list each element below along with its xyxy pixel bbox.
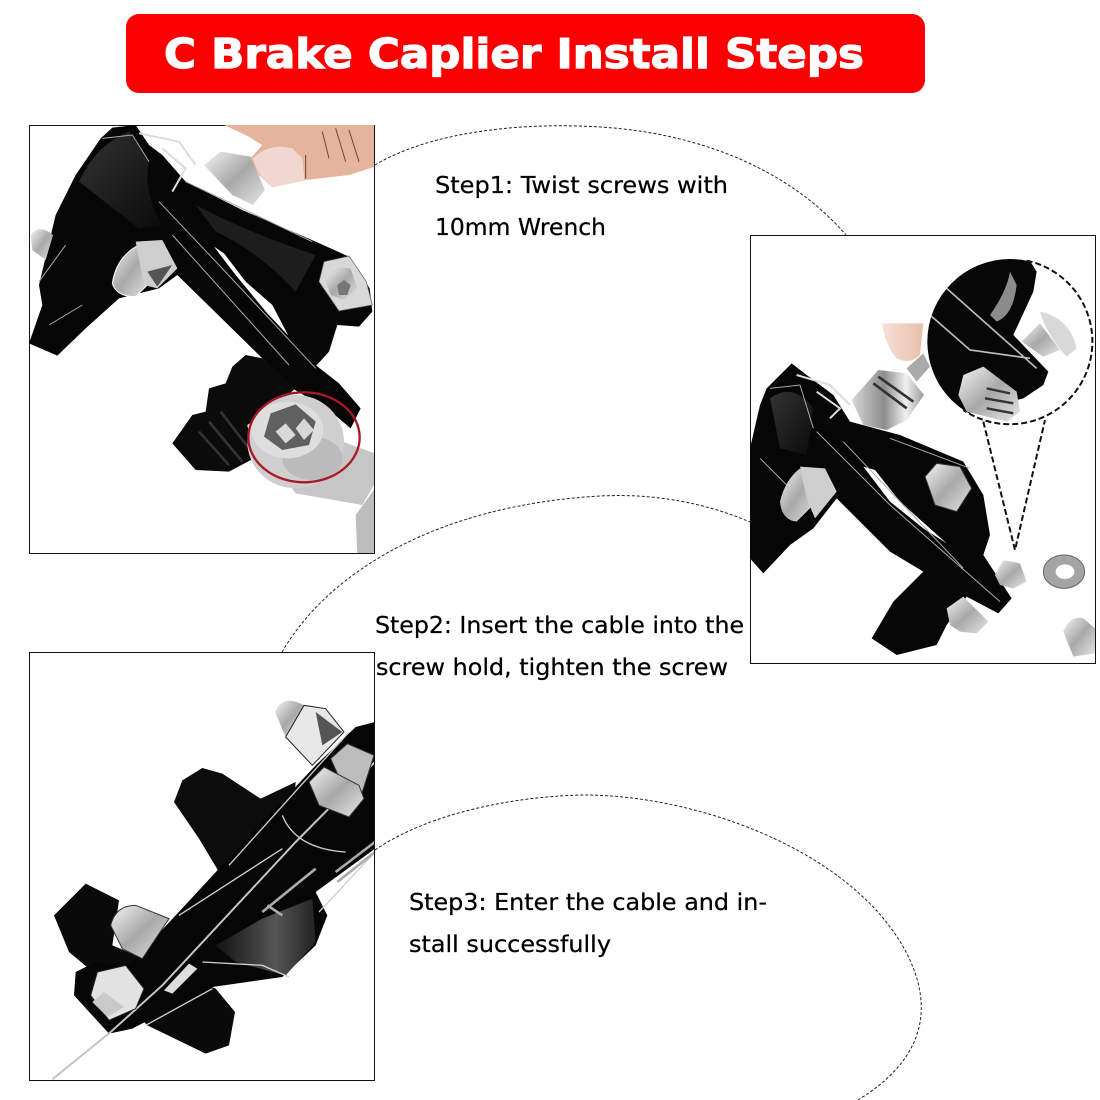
thin silver pin bbox=[907, 353, 930, 382]
hand blur at bottom right bbox=[356, 488, 375, 555]
step 3 text: Step3: Enter the cable and in- bbox=[409, 890, 767, 916]
lower nut and stud bbox=[947, 597, 988, 633]
panel: cable through caliper bbox=[30, 652, 375, 1080]
bolt head at arm tip bbox=[995, 560, 1027, 588]
step 3 text: stall successfully bbox=[409, 932, 611, 958]
lower brake pad bbox=[54, 884, 235, 1054]
inset magnified circle bbox=[917, 258, 1093, 424]
loose cap nut bbox=[1063, 618, 1095, 657]
arm sheen bbox=[770, 392, 813, 455]
barrel dark bands bbox=[873, 377, 913, 408]
dashed arc: step 3 bbox=[375, 795, 921, 1100]
highlight lines bbox=[760, 385, 1000, 602]
finger bbox=[224, 125, 375, 187]
brake shoe bbox=[172, 355, 296, 472]
caliper black body bbox=[29, 125, 372, 428]
step 3 text bbox=[409, 890, 767, 958]
dashed arc: step 1 bbox=[375, 126, 846, 235]
photo frame bbox=[750, 236, 1096, 664]
caliper black body bbox=[74, 722, 375, 1034]
hex bolt bbox=[309, 744, 374, 817]
cable hook bbox=[797, 375, 850, 418]
wrench head speckle bbox=[282, 437, 342, 480]
shoe ridges bbox=[199, 412, 249, 465]
silver barrel bbox=[204, 152, 265, 205]
step 2 text bbox=[375, 613, 744, 681]
slot in arm bbox=[863, 467, 947, 543]
inset dashed border bbox=[963, 261, 1092, 424]
end nut and stud bbox=[91, 965, 144, 1020]
banner background bbox=[126, 14, 925, 93]
caliper illustration bbox=[29, 125, 375, 555]
slot in arm bbox=[214, 247, 288, 336]
dashed arc: step 2 bbox=[282, 496, 750, 652]
inset contents bbox=[917, 258, 1077, 422]
caliper black body bbox=[750, 363, 1012, 655]
title banner bbox=[126, 14, 925, 93]
panel: exploded view of caliper with inset bbox=[750, 236, 1096, 664]
cable hook bbox=[139, 133, 196, 192]
washer highlight bbox=[164, 964, 197, 994]
highlight lines bbox=[146, 732, 375, 1025]
caliper illustration bbox=[52, 701, 375, 1079]
step 1 text: 10mm Wrench bbox=[435, 215, 606, 241]
arm highlight bbox=[79, 132, 162, 228]
bolt in socket bbox=[276, 418, 314, 443]
hex bolt on arm bbox=[925, 463, 972, 512]
inset white backing bbox=[927, 259, 1093, 424]
upper arm sheen bbox=[196, 205, 316, 292]
title text: C Brake Caplier Install Steps bbox=[164, 30, 864, 78]
red ellipse highlight bbox=[248, 392, 360, 482]
large cap nut bbox=[112, 240, 177, 297]
hex socket ring bbox=[251, 402, 323, 458]
step 1 text bbox=[435, 173, 728, 241]
small cap nut bbox=[31, 229, 53, 260]
step 1 text: Step1: Twist screws with bbox=[435, 173, 728, 199]
brake cable bbox=[52, 762, 375, 1079]
wrench head bbox=[247, 395, 344, 488]
highlight lines bbox=[39, 135, 316, 368]
lower cap nut bbox=[111, 905, 169, 959]
top cap nut bbox=[275, 701, 344, 765]
caliper illustration bbox=[750, 258, 1095, 657]
hex bolt on arm bbox=[319, 256, 372, 311]
silver barrel bbox=[852, 370, 924, 430]
photo frame bbox=[30, 126, 374, 554]
washer bbox=[1043, 555, 1085, 588]
upper brake pad bbox=[174, 768, 296, 872]
step 2 text: screw hold, tighten the screw bbox=[376, 655, 728, 681]
dashed pointer lines bbox=[983, 420, 1045, 550]
body sheen bbox=[216, 899, 316, 975]
fingernail bbox=[253, 147, 304, 187]
hex socket bbox=[264, 404, 316, 450]
spring and mechanism bbox=[262, 842, 375, 915]
large cap nut bbox=[780, 467, 837, 522]
photo frame bbox=[30, 652, 374, 1080]
skin creases bbox=[306, 128, 359, 178]
blurred finger bbox=[882, 323, 923, 361]
wrench handle bbox=[292, 442, 374, 505]
step 2 text: Step2: Insert the cable into the bbox=[375, 613, 744, 639]
panel: photo of wrench on brake caliper bbox=[29, 125, 375, 555]
